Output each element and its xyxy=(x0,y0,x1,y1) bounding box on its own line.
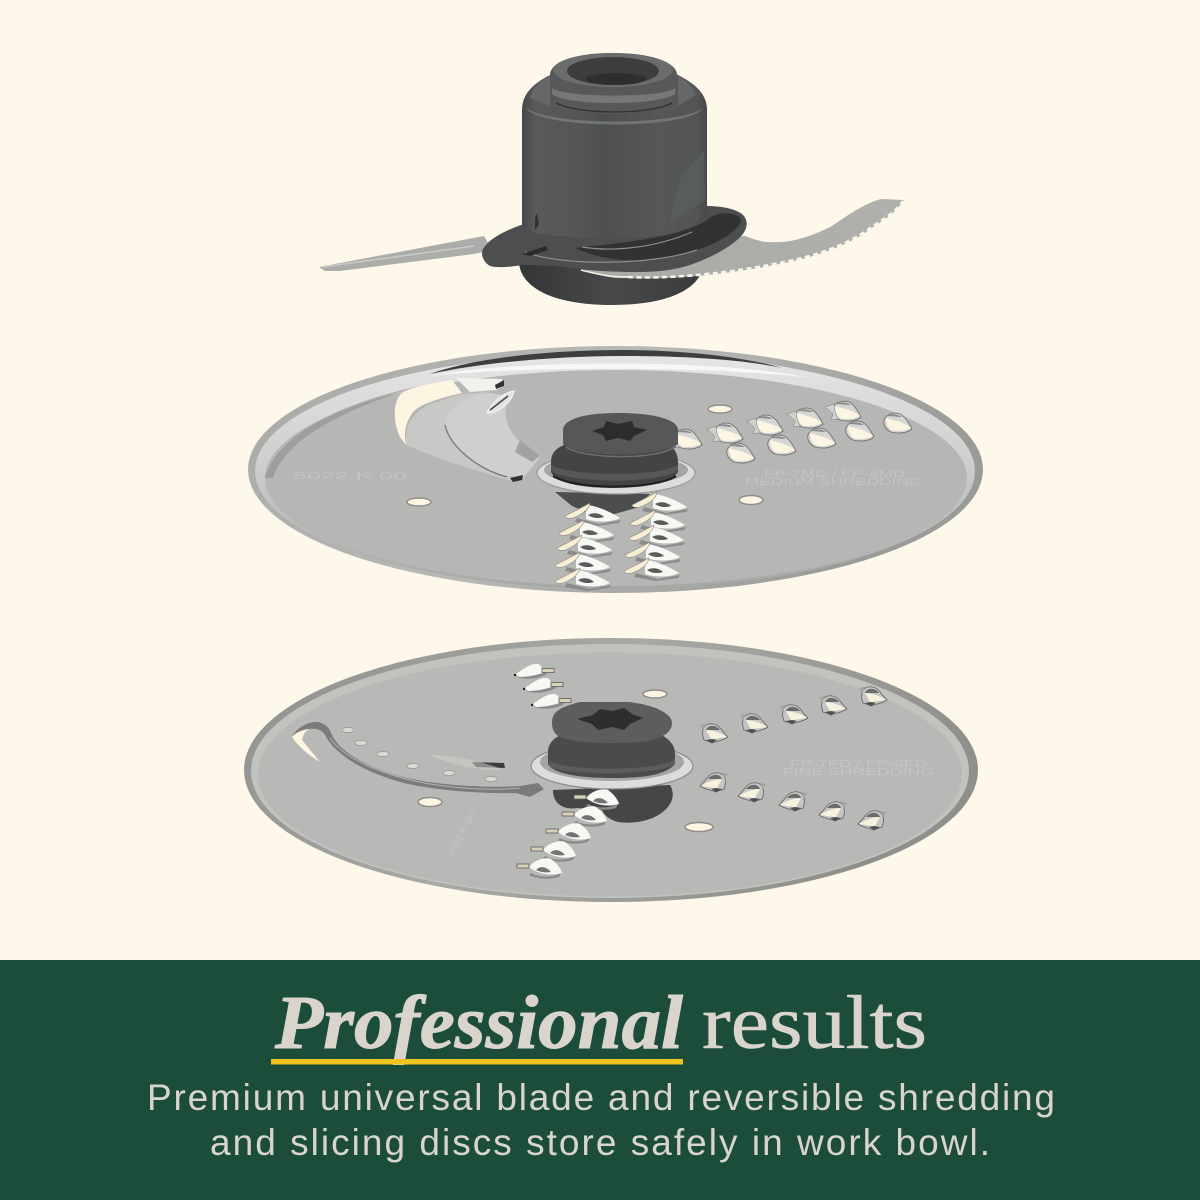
universal blade assembly xyxy=(319,53,904,305)
disc rim xyxy=(248,346,983,593)
heading: Professional xyxy=(274,981,683,1065)
disc surface xyxy=(258,652,962,896)
heading xyxy=(274,981,927,1065)
band background xyxy=(0,960,1200,1200)
etched markings: MEDIUM SHREDDING xyxy=(745,477,922,488)
shredding holes: right group xyxy=(666,401,912,463)
blade base skirt xyxy=(519,262,703,305)
hub base xyxy=(548,733,675,778)
heading: results xyxy=(702,981,927,1065)
small dots xyxy=(342,728,497,782)
serrated edge xyxy=(628,201,903,277)
etched markings xyxy=(445,759,934,859)
etched markings: FP-7FD / FP-9FD xyxy=(790,759,927,770)
hub washer xyxy=(537,452,695,494)
left blade arm xyxy=(319,236,492,271)
etched markings: 5022 K 00 xyxy=(445,810,478,859)
hub base xyxy=(551,442,678,488)
disc surface xyxy=(265,370,967,586)
small round holes xyxy=(418,798,442,806)
subheading: and slicing discs store safely in work bowl. xyxy=(210,1122,990,1163)
medium shredding disc xyxy=(248,346,983,593)
flange highlights xyxy=(525,232,697,262)
collar opening xyxy=(567,57,659,85)
collar xyxy=(550,53,677,114)
etched markings: FINE SHREDDING xyxy=(783,767,934,778)
disc rim xyxy=(244,638,978,902)
flange xyxy=(482,206,747,272)
shredding holes: bottom group xyxy=(555,492,688,591)
heading underline xyxy=(271,1059,683,1064)
slicing ramp xyxy=(406,392,524,481)
upper rim reflection xyxy=(430,350,782,374)
cream background xyxy=(0,0,1200,960)
caption band xyxy=(0,960,1200,1200)
flange dark recess xyxy=(575,213,741,260)
small round holes xyxy=(407,498,431,506)
body xyxy=(522,74,707,238)
subheading: Premium universal blade and reversible shredding xyxy=(147,1077,1055,1118)
hub washer xyxy=(531,743,693,789)
slicing slot and arm xyxy=(292,727,320,762)
etched markings: 5022 K 00 xyxy=(293,471,408,482)
right serrated blade xyxy=(581,199,904,278)
fine shredding disc xyxy=(244,638,978,902)
hub star socket xyxy=(577,708,643,730)
etched markings: FP-7MD / FP-8MD xyxy=(764,469,905,480)
etched markings xyxy=(293,469,922,488)
shredding holes: left group xyxy=(514,664,619,879)
hub top xyxy=(552,702,672,743)
shoulder notches xyxy=(530,76,550,106)
hub top xyxy=(563,413,678,454)
subheading xyxy=(147,1077,1055,1163)
hub star socket xyxy=(592,421,647,441)
under-hub shadow xyxy=(553,785,673,823)
shredding holes: right group xyxy=(700,687,887,830)
shoulder highlight xyxy=(526,108,703,124)
slicing slot crescent xyxy=(395,380,462,445)
